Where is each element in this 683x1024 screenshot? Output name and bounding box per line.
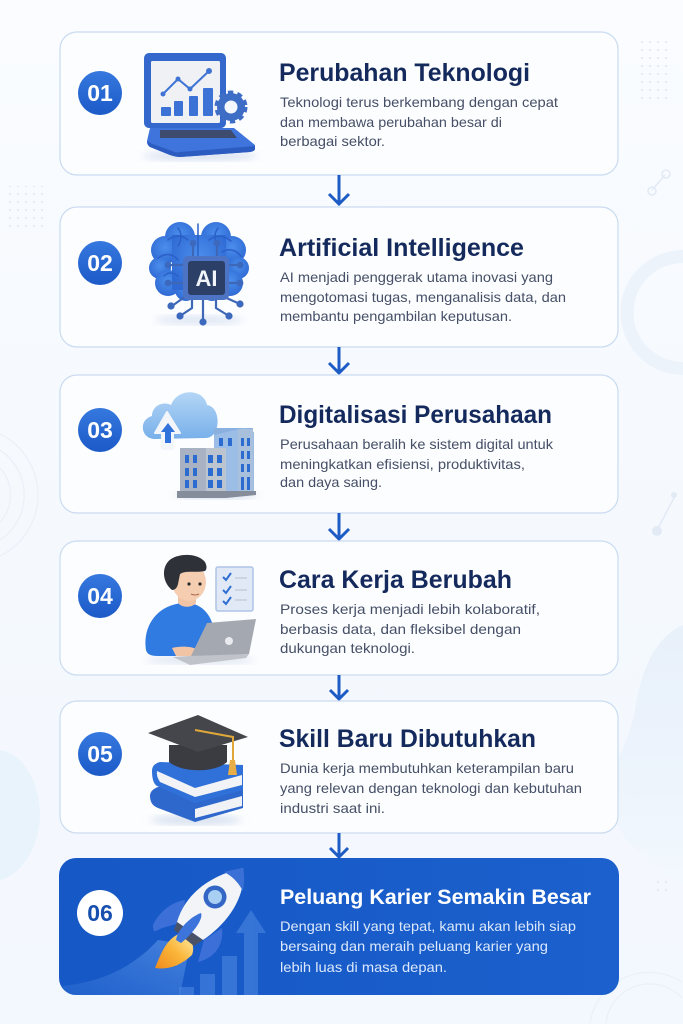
graduation cap: [169, 745, 227, 770]
description: mengotomasi tugas, menganalisis data, dan: [280, 289, 566, 305]
description: dan daya saing.: [280, 474, 382, 490]
title: Skill Baru Dibutuhkan: [279, 725, 536, 753]
arrow 2 to 3: [329, 347, 349, 373]
icon: cloud upload and buildings: [143, 392, 258, 498]
title: Cara Kerja Berubah: [279, 566, 512, 594]
description: membantu pengambilan keputusan.: [280, 308, 512, 324]
number badge 02: [78, 241, 122, 285]
description: Teknologi terus berkembang dengan cepat: [280, 94, 558, 110]
icon: AI brain chip: [149, 222, 249, 326]
description: Dengan skill yang tepat, kamu akan lebih siap: [280, 918, 576, 934]
description: [280, 601, 540, 656]
panel 3: Digitalisasi Perusahaan: [60, 375, 618, 513]
description: AI menjadi penggerak utama inovasi yang: [280, 269, 553, 285]
panel 2: Artificial Intelligence: [60, 207, 618, 347]
description: dukungan teknologi.: [280, 640, 415, 656]
description: [280, 94, 558, 149]
description: [280, 760, 582, 816]
panel 1: Perubahan Teknologi: [60, 32, 618, 175]
description: [280, 269, 566, 324]
number badge 06: [77, 890, 123, 936]
description: industri saat ini.: [280, 800, 385, 816]
number badge 02: 02: [87, 250, 113, 276]
number badge 03: [78, 408, 122, 452]
icon: rocket: [153, 868, 244, 968]
arrow 1 to 2: [329, 175, 349, 204]
description: dan membawa perubahan besar di: [280, 114, 502, 130]
title: Peluang Karier Semakin Besar: [280, 885, 592, 909]
description: Perusahaan beralih ke sistem digital untuk: [280, 436, 554, 452]
number badge 06: 06: [87, 900, 113, 926]
number badge 05: [78, 732, 122, 776]
icon: graduation cap on books: [148, 715, 248, 824]
icon: laptop with chart and gear: [142, 53, 258, 160]
description: lebih luas di masa depan.: [280, 959, 447, 975]
description: yang relevan dengan teknologi dan kebutuhan: [280, 780, 582, 796]
arrow 5 to 6: [330, 833, 348, 857]
number badge 03: 03: [87, 417, 113, 443]
description: berbagai sektor.: [280, 133, 385, 149]
arrow 4 to 5: [330, 675, 348, 699]
description: bersaing dan meraih peluang karier yang: [280, 938, 548, 954]
top book: [152, 762, 243, 803]
number badge 01: [78, 71, 122, 115]
number badge 01: 01: [87, 80, 113, 106]
description: Dunia kerja membutuhkan keterampilan baru: [280, 760, 574, 776]
rising wave and bar decoration: [62, 910, 266, 995]
title: Digitalisasi Perusahaan: [279, 401, 552, 429]
number badge 04: [78, 574, 122, 618]
description: meningkatkan efisiensi, produktivitas,: [280, 456, 525, 472]
description: [280, 436, 554, 490]
arrow 3 to 4: [329, 513, 349, 539]
description: Proses kerja menjadi lebih kolaboratif,: [280, 601, 540, 617]
panel 4: Cara Kerja Berubah: [60, 541, 618, 675]
number badge 04: 04: [87, 583, 113, 609]
icon: person with laptop and checklist: [145, 555, 256, 665]
bottom book: [150, 787, 243, 822]
description: [280, 918, 576, 975]
panel 6: Peluang Karier Semakin Besar: [59, 858, 619, 995]
icon: AI brain chip: AI: [196, 266, 218, 291]
title: Perubahan Teknologi: [279, 59, 530, 87]
panel 5: Skill Baru Dibutuhkan: [60, 701, 618, 833]
number badge 05: 05: [87, 741, 113, 767]
description: berbasis data, dan fleksibel dengan: [280, 621, 521, 637]
title: Artificial Intelligence: [279, 234, 524, 262]
